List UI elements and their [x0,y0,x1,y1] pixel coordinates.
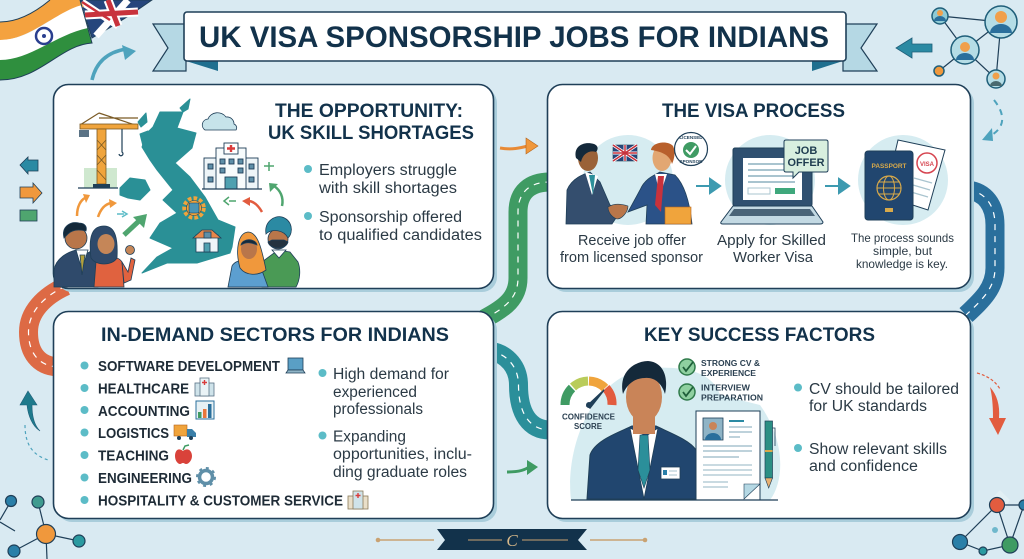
illustration: professional with CV [570,361,780,500]
icon: apple [175,445,192,464]
icon: India flag [0,0,92,80]
icon: bar chart [196,401,214,419]
panel: the opportunity [54,84,497,292]
arrow: teal up left [20,391,40,431]
captions: visa steps: Worker Visa [733,249,814,266]
bullets: sectors notes: opportunities, inclu- [333,446,472,463]
icon: pen [765,421,775,488]
illustration: passport and visa: PASSPORT [872,163,907,170]
road: blue [966,190,995,315]
panel: in-demand sectors [54,312,497,522]
sector list: ACCOUNTING [98,403,190,420]
icon: licensed sponsor badge: SPONSOR [680,159,703,164]
bullets: sectors notes: ding graduate roles [333,464,467,481]
bullets: success factors: CV should be tailored [809,381,959,398]
gauge: confidence score: SCORE [574,422,602,431]
bullets: opportunity: to qualified candidates [319,227,482,244]
checklist: PREPARATION [701,394,763,402]
road: orange [28,286,66,367]
sector list [80,358,343,510]
sector list: ENGINEERING [98,470,192,487]
captions: visa steps: Receive job offer [578,232,686,249]
bullets: sectors notes: experienced [333,384,417,401]
people: left pair [54,223,135,287]
bullets: success factors: for UK standards [809,398,927,415]
icon: UK flag [80,0,152,38]
bullets: opportunity: with skill shortages [318,180,457,197]
icon: flag [613,145,637,161]
icon: cloud [202,113,237,130]
title text: UK VISA SPONSORSHIP JOBS FOR INDIANS [199,21,829,54]
icon: crane [78,113,138,188]
icon: UK map [120,99,235,273]
network: top right people [932,6,1017,88]
checklist [679,359,763,402]
checklist: STRONG CV & [701,359,760,368]
icon: house [193,230,221,252]
gauge: confidence score [562,381,615,431]
panel: key success factors [548,312,974,522]
sector list: LOGISTICS [98,425,169,442]
icon: truck [174,425,196,440]
sector list: HEALTHCARE [98,380,189,398]
arrow: dashed teal top right [982,100,1002,141]
panel: the visa process [548,84,974,292]
bullets: opportunity: Employers struggle [319,162,457,179]
people: right pair [228,217,300,287]
sector list: HOSPITALITY & CUSTOMER SERVICE [98,492,343,510]
captions: visa steps: from licensed sponsor [560,249,703,266]
arrow: dashed red [977,373,1000,389]
captions: visa steps: knowledge is key. [856,257,948,271]
captions: visa steps [560,231,954,271]
illustration: handshake [566,132,708,225]
bullets: sectors notes [318,366,472,481]
bullets: sectors notes: professionals [333,401,423,418]
illustration: passport and visa: VISA [920,162,935,168]
icon: licensed sponsor badge: LICENSED [679,135,703,140]
bullets: sectors notes: High demand for [333,366,449,383]
captions: visa steps: simple, but [873,244,933,258]
icon: hospital small [195,378,214,396]
checklist: INTERVIEW [701,384,751,392]
heading: success factors: KEY SUCCESS FACTORS [644,325,875,346]
map arrows [77,162,283,235]
heading: sectors: IN-DEMAND SECTORS FOR INDIANS [101,325,449,346]
bullets: success factors: and confidence [809,458,918,475]
footer ribbon: C [506,531,518,550]
heading: the opportunity [268,101,474,144]
captions: visa steps: The process sounds [851,231,954,245]
arrow: step 1 to 2 [696,179,720,193]
heading: the opportunity: THE OPPORTUNITY: [275,101,463,122]
captions: visa steps: Apply for Skilled [717,232,826,249]
bullets: opportunity [304,162,482,244]
arrow: orange between top panels [500,138,538,154]
icon: licensed sponsor badge [674,132,708,166]
sector list: SOFTWARE DEVELOPMENT [98,358,280,375]
checklist: EXPERIENCE [701,369,756,378]
road: teal [490,351,550,430]
gauge: confidence score: CONFIDENCE [562,412,615,422]
footer ribbon [376,529,647,550]
network: bottom left [0,496,85,559]
arrow: dashed teal left [25,425,48,460]
bullets: success factors [794,381,959,475]
legend arrows left [20,157,42,221]
arrow: step 2 to 3 [825,179,849,193]
icon: laptop [286,358,305,373]
road: green [484,182,550,319]
icon: gear [184,198,204,218]
heading: visa process: THE VISA PROCESS [662,101,845,122]
illustration: passport and visa [858,135,948,225]
illustration: laptop and job offer: JOB [795,145,817,157]
icon: hospital [202,143,262,189]
sector list: TEACHING [98,448,169,464]
arrow: curved teal top left [92,45,136,80]
bullets: sectors notes: Expanding [333,428,406,446]
network: bottom right [952,490,1024,555]
bullets: success factors: Show relevant skills [809,441,947,458]
arrow: red right [989,387,1006,435]
arrow: teal pointing left top right [896,38,932,58]
icon: gear small [197,468,215,486]
arrow: green between lower panels [507,460,538,475]
illustration: laptop and job offer [721,135,828,225]
illustration: laptop and job offer: OFFER [788,157,825,169]
icon: hotel [348,491,368,509]
title banner [153,12,877,71]
heading: the opportunity: UK SKILL SHORTAGES [268,123,474,144]
bullets: opportunity: Sponsorship offered [319,209,462,226]
